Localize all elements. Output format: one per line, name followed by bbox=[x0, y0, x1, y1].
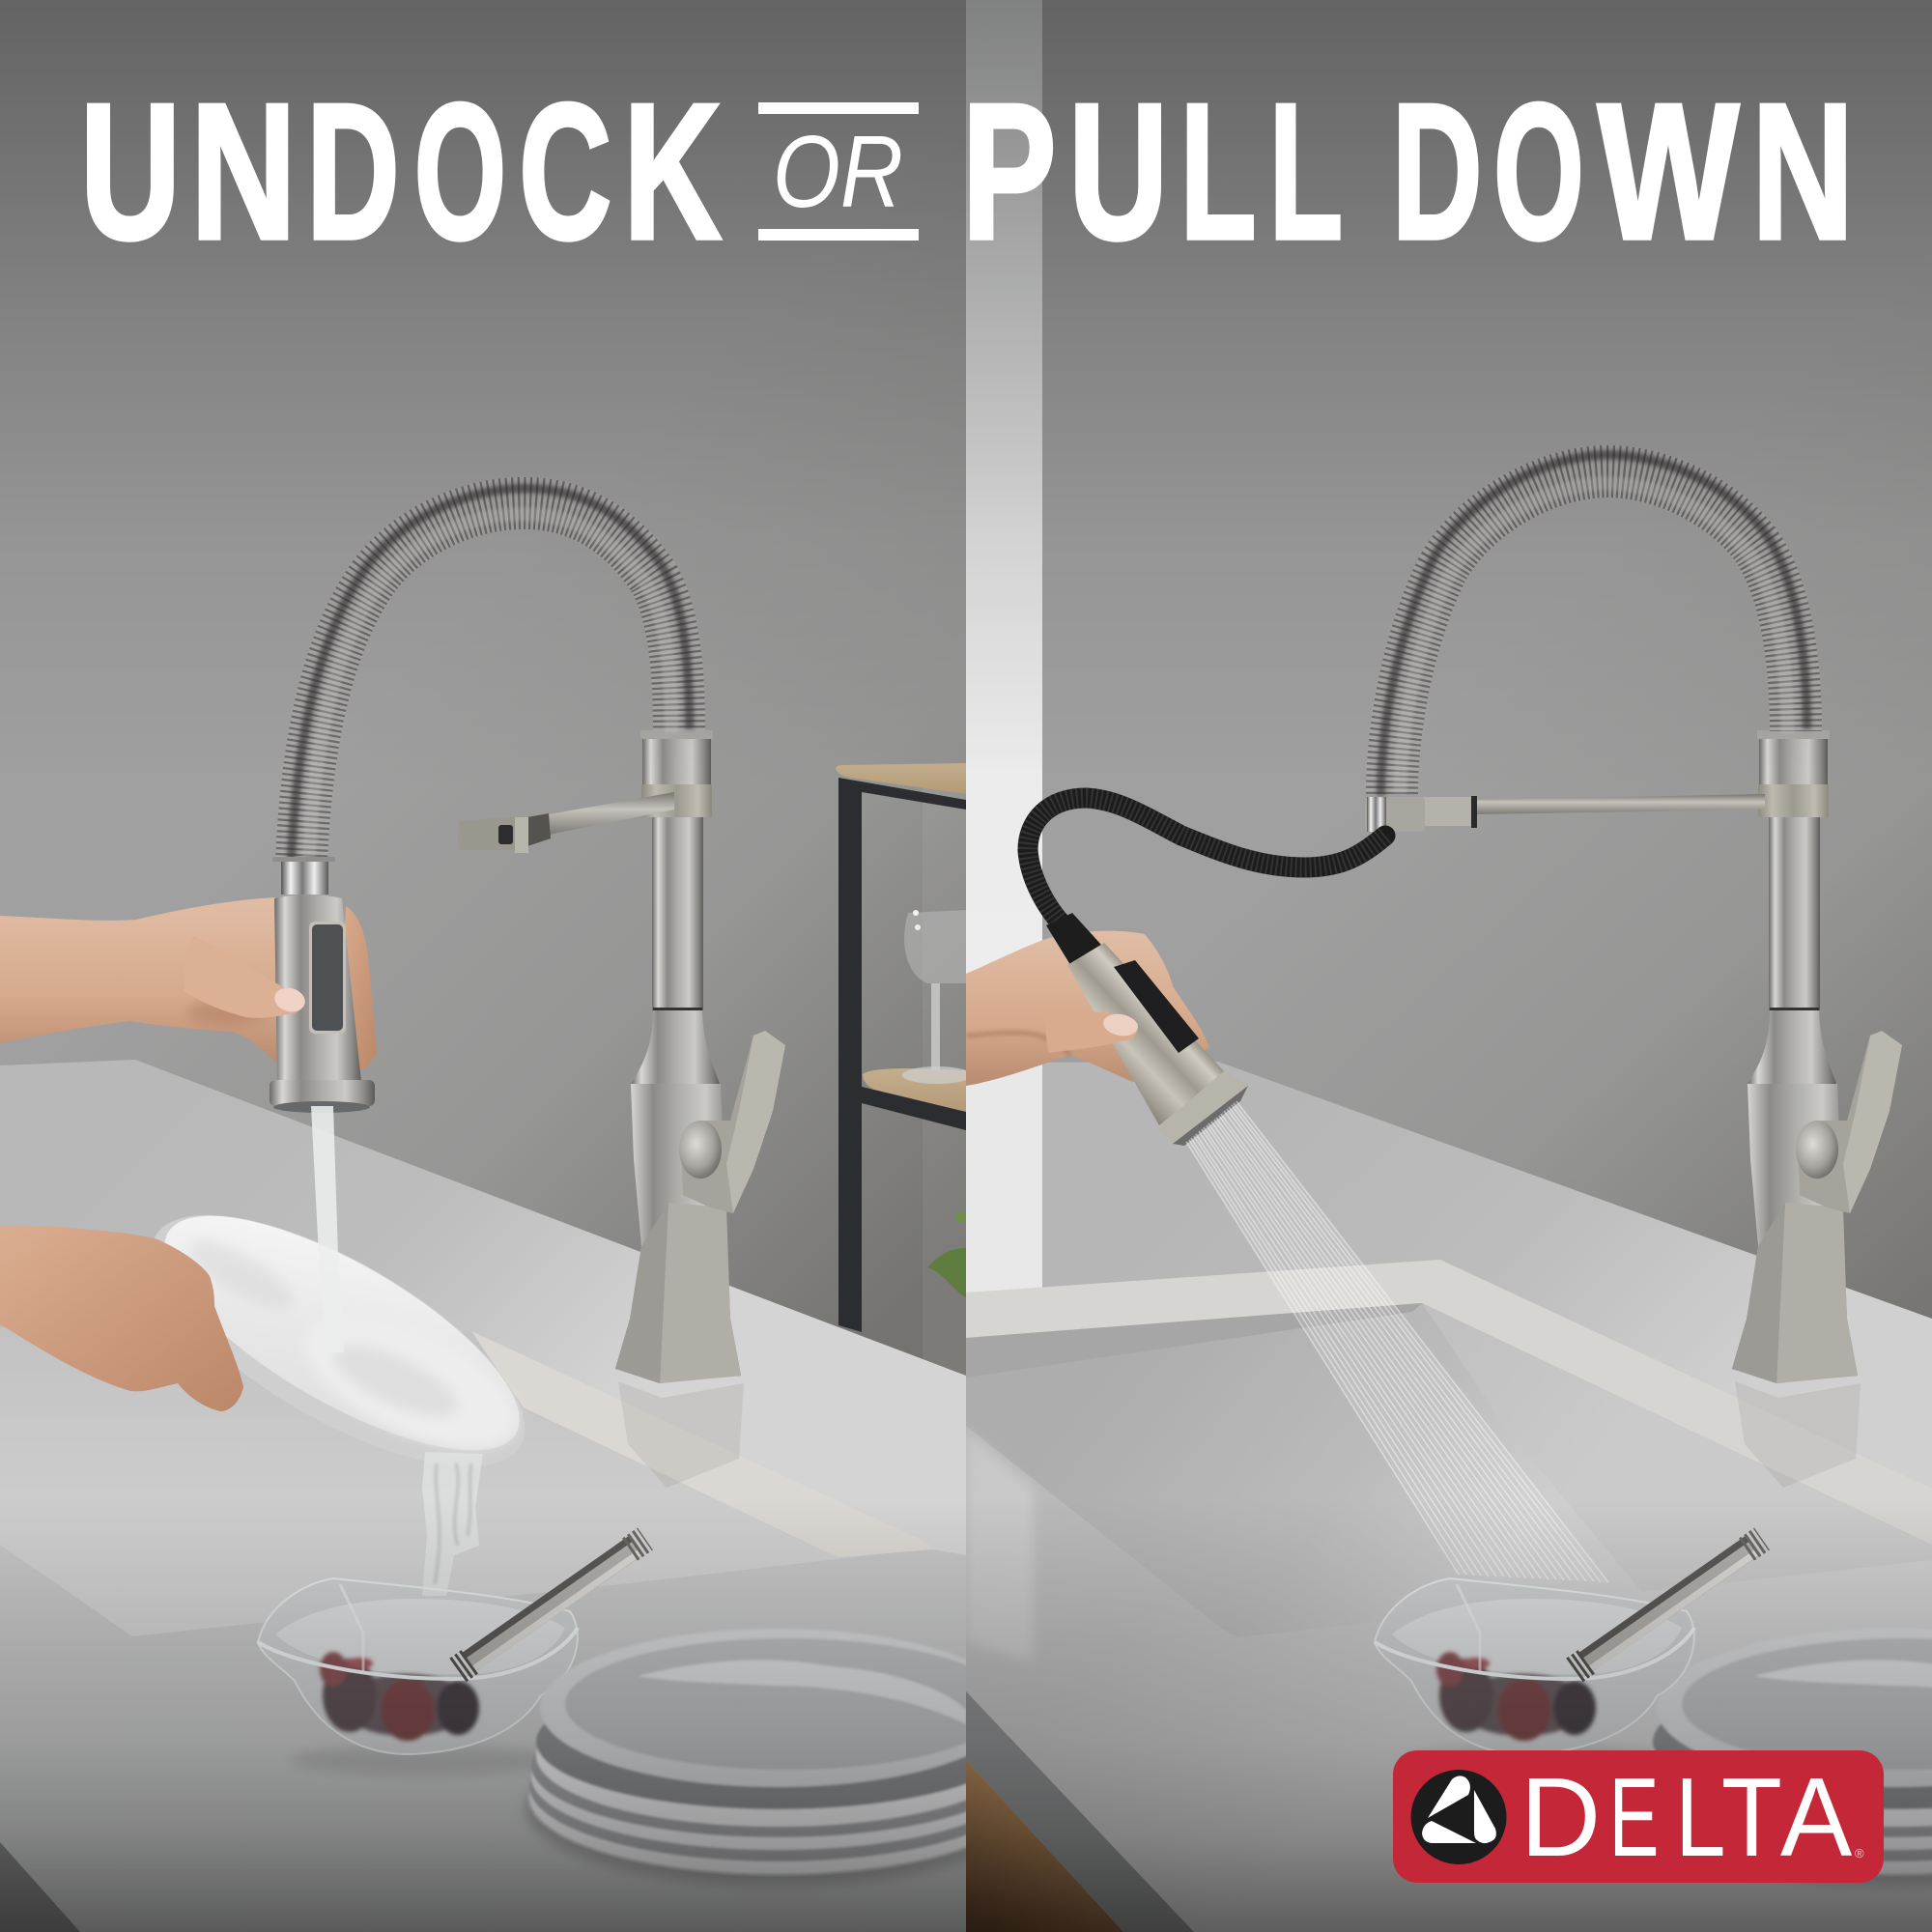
right bowl and spoon bbox=[1375, 1538, 1762, 1776]
counter reflection bbox=[966, 1430, 1034, 1662]
left counter dark corner bbox=[0, 1842, 80, 1932]
left hand lower bbox=[0, 1226, 243, 1411]
faucet base reflection right bbox=[1735, 1381, 1861, 1488]
heading: undock: O bbox=[414, 64, 506, 280]
logo: Delta badge bbox=[1393, 1750, 1884, 1883]
icon: plant bbox=[927, 1211, 969, 1297]
black braided hose bbox=[1028, 798, 1385, 932]
panel: left undock scene bbox=[0, 0, 1031, 1932]
white column bbox=[966, 0, 1042, 974]
faucet body right bbox=[1732, 730, 1902, 1383]
wood cabinet bbox=[966, 1760, 1123, 1932]
bottom darkening gradient bbox=[0, 1497, 1932, 1932]
left sink rim bbox=[471, 1331, 932, 1557]
logo wordmark: L bbox=[1675, 1754, 1725, 1880]
held white plate bbox=[155, 1215, 525, 1455]
right counter edge bbox=[966, 1691, 1194, 1932]
left counter bbox=[0, 1060, 966, 1636]
heading: pull down: L bbox=[1269, 64, 1343, 280]
left plate stack bbox=[523, 1629, 966, 1887]
heading: pull down: N bbox=[1752, 64, 1854, 280]
logo wordmark: T bbox=[1721, 1754, 1782, 1880]
top darkening gradient bbox=[0, 0, 1932, 792]
registered mark: ® bbox=[1855, 1846, 1864, 1861]
left hand upper bbox=[0, 897, 377, 1069]
right plate stack bbox=[1641, 1629, 1932, 1886]
heading: undock: C bbox=[519, 64, 611, 280]
faucet body left bbox=[615, 730, 785, 1383]
right sink rim bbox=[966, 1260, 1712, 1424]
left thumb bbox=[184, 936, 308, 1018]
left spray head bbox=[270, 857, 375, 1113]
horizontal arm bbox=[1365, 794, 1765, 832]
heading: pull down: D bbox=[1392, 64, 1482, 280]
sink right wall bbox=[1423, 1304, 1441, 1320]
heading: or with rules: OR bbox=[773, 114, 903, 229]
right wall bbox=[1042, 0, 1932, 1319]
spring hose left bbox=[291, 489, 690, 867]
left wall bbox=[0, 0, 966, 1449]
heading: pull down: L bbox=[1180, 64, 1256, 280]
left counter front area bbox=[0, 1546, 966, 1853]
right spray head bbox=[1046, 913, 1248, 1146]
panel: right pull-down scene bbox=[966, 0, 1932, 1932]
heading: pull down: W bbox=[1598, 64, 1739, 280]
spring hose right bbox=[1381, 455, 1806, 795]
shelf unit bbox=[836, 763, 966, 1332]
heading: undock: N bbox=[190, 64, 297, 280]
left water stream bbox=[311, 1106, 344, 1352]
logo wordmark: D bbox=[1520, 1754, 1601, 1880]
logo wordmark: A bbox=[1780, 1754, 1853, 1880]
heading: undock: D bbox=[306, 64, 400, 280]
sink back wall bbox=[968, 1303, 1422, 1349]
heading: pull down: P bbox=[962, 64, 1057, 280]
right hand bbox=[966, 931, 1209, 1086]
side arm with dock bbox=[458, 792, 674, 853]
faucet base reflection bbox=[618, 1381, 744, 1488]
left sink interior bbox=[0, 1327, 711, 1636]
water spray fan bbox=[1186, 1101, 1608, 1582]
icon: delta emblem bbox=[1410, 1770, 1507, 1864]
column reflection bbox=[966, 1063, 1042, 1294]
heading: pull down: U bbox=[1068, 64, 1168, 280]
title bbox=[80, 64, 1854, 280]
heading: undock: U bbox=[80, 64, 181, 280]
right counter bbox=[966, 1062, 1932, 1932]
heading: undock: K bbox=[624, 64, 722, 280]
right sink interior bbox=[966, 1338, 1238, 1534]
falling water bbox=[422, 1452, 483, 1596]
icon: wine glass bbox=[902, 910, 972, 1084]
left bowl and spoon bbox=[258, 1538, 645, 1776]
logo wordmark: E bbox=[1609, 1754, 1659, 1880]
heading: pull down: O bbox=[1493, 64, 1584, 280]
heading: or with rules bbox=[758, 102, 919, 241]
right thumb bbox=[1043, 1009, 1140, 1053]
